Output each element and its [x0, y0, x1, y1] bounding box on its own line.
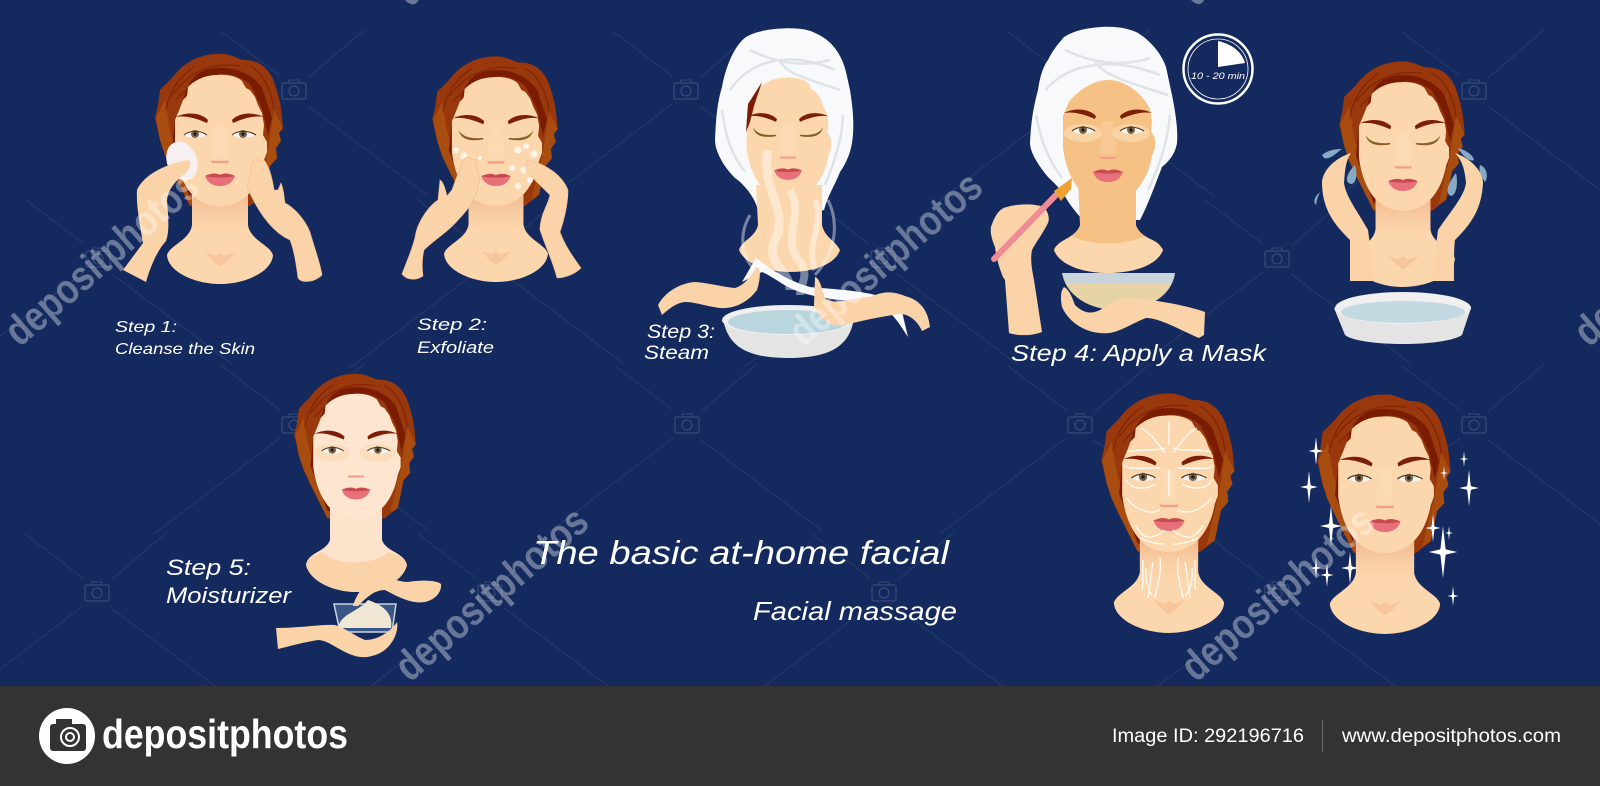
neck and shoulders [739, 185, 840, 272]
right hand [247, 159, 322, 282]
image id: Image ID: 292196716 [1112, 726, 1304, 747]
label: step 1: Cleanse the Skin [115, 341, 255, 358]
right hand [814, 277, 930, 331]
label: step 3: Step 3: [647, 322, 715, 343]
towel front [1056, 66, 1162, 120]
hair [294, 374, 416, 518]
left hand [123, 160, 190, 282]
arm and hand with brush [991, 204, 1049, 335]
head [432, 56, 558, 282]
sparkles [1300, 437, 1479, 606]
right hand [526, 160, 581, 278]
figure: step 3 steam [658, 28, 930, 358]
hair and head [155, 54, 283, 284]
foam [453, 143, 538, 189]
footer band [0, 686, 1600, 786]
label: step 2: Step 2: [417, 315, 487, 334]
logo wordmark: depositphotos [102, 711, 348, 757]
cream jar [334, 600, 396, 632]
figure: step 4 mask [991, 27, 1252, 338]
bowl [722, 305, 854, 358]
lower hand [276, 622, 397, 657]
figure: step 2 exfoliate [402, 56, 581, 282]
label: step 5: Moisturizer [166, 583, 293, 608]
timer icon: 10 - 20 min [1191, 71, 1245, 81]
figure: step 1 cleanse [123, 54, 322, 284]
label: step 2: Exfoliate [417, 338, 494, 357]
label: step 1: Step 1: [115, 319, 177, 336]
right hand and arm [1433, 153, 1483, 281]
face [747, 78, 831, 198]
neck and shoulders [306, 505, 407, 592]
head [1339, 61, 1465, 287]
masked face [1063, 71, 1155, 202]
figure: facial massage [1101, 393, 1235, 633]
subtitle: Facial massage [753, 596, 957, 626]
left hand [658, 267, 760, 315]
website: www.depositphotos.com [1341, 726, 1561, 747]
left hand and arm [1322, 153, 1375, 281]
figure: step 5 moisturizer [276, 374, 441, 657]
towel folds [1036, 50, 1170, 190]
shoulder skin [306, 552, 407, 592]
mask bowl [1062, 273, 1175, 310]
logo icon [39, 708, 95, 764]
label: step 4: Step 4: Apply a Mask [1011, 340, 1268, 366]
water drops [1314, 148, 1487, 205]
label: step 3: Steam [644, 343, 709, 364]
steam [743, 150, 834, 295]
head [1317, 394, 1451, 634]
towel folds [722, 50, 843, 185]
brush [994, 178, 1072, 259]
lower hand [1061, 287, 1205, 338]
neck and shoulders [1054, 180, 1163, 273]
timer icon [1184, 34, 1252, 104]
basin [1334, 292, 1471, 344]
title: The basic at-home facial [533, 534, 951, 571]
face [313, 394, 401, 519]
head [1101, 393, 1235, 633]
hair sliver [746, 82, 762, 132]
upper hand [353, 576, 441, 606]
massage lines [1124, 422, 1214, 598]
figure: rinse [1314, 61, 1487, 344]
cotton pad [161, 137, 203, 185]
towel [1030, 27, 1177, 220]
figure: glowing skin [1300, 394, 1479, 634]
label: step 5: Step 5: [166, 555, 251, 580]
towel cloth strip [742, 258, 908, 337]
left hand [402, 157, 480, 279]
towel [715, 28, 853, 215]
